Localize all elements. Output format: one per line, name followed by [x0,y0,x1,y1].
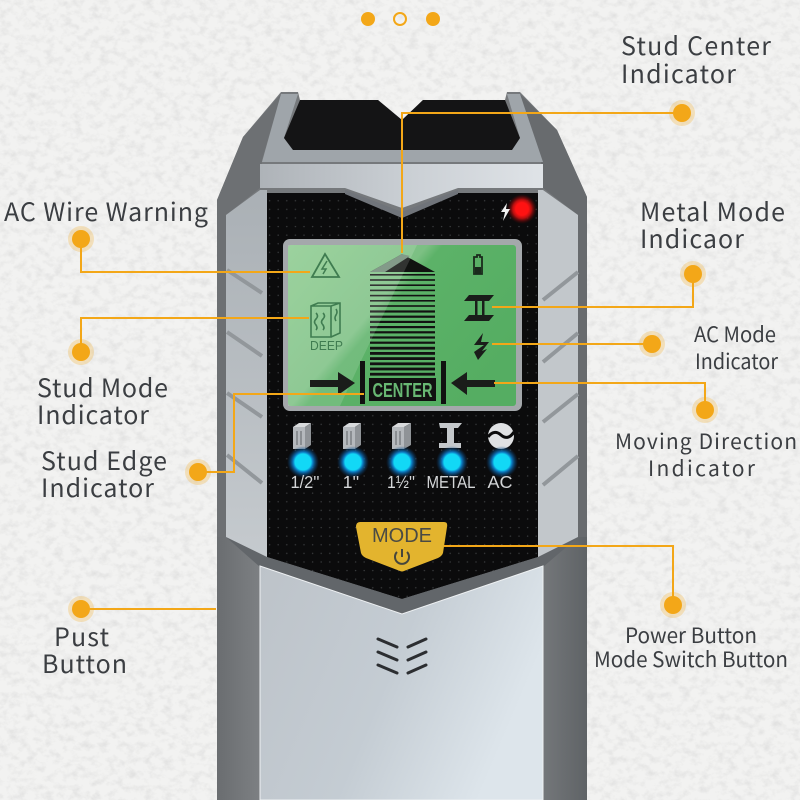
callout: stud edge [41,394,364,505]
right side plate [538,190,578,557]
callout: AC mode [492,319,779,376]
center glare [288,245,417,406]
top silver collar [262,94,543,162]
mode button [356,522,447,572]
CENTER label [369,378,436,402]
speaker slots [378,639,426,673]
icon: metal beam small [439,423,462,448]
callout: AC wire warning: AC Wire Warning [4,193,208,229]
LED labels: METAL [426,472,476,492]
icon: AC bolt [474,333,489,360]
right upper bevel [520,94,587,800]
CENTER label: CENTER [372,380,433,402]
callout: metal mode: Metal Mode [640,193,785,229]
callout: stud mode: Stud Mode [37,369,168,405]
silver band [260,164,543,208]
LED labels [290,472,512,492]
sensor window [284,100,520,150]
left upper bevel [217,94,281,800]
panel dot grid [267,193,538,599]
callout: stud edge: Stud Edge [41,442,167,478]
icon: AC wave [488,423,514,449]
callout: AC mode: Indicator [695,346,779,376]
LED labels: 1/2'' [290,472,320,492]
icon: metal I-beam [464,295,494,321]
LED labels: 1½'' [387,472,415,492]
LCD screen [283,239,522,411]
icon: AC warning triangle [312,254,339,277]
icon: battery [474,255,482,274]
callout: stud mode [37,318,309,432]
icon: power [395,549,409,564]
mode button: MODE [372,525,432,547]
stud and mode indicators row [287,423,518,492]
side ribs [227,270,578,485]
callout: push button [42,596,216,681]
black control panel [267,193,538,599]
left side plate [226,190,267,557]
callout: push button: Pust [54,618,110,654]
callout: stud center: Stud Center [621,27,771,63]
callout: metal mode: Indicaor [640,220,744,256]
callout: stud center [402,27,771,253]
lower chevron band [226,537,578,615]
icon: half inch stud [293,423,311,449]
power warning LED [501,194,537,224]
pagination dots [361,12,440,26]
callout: moving direction: Moving Direction [615,426,797,456]
chevron highlight [345,190,458,218]
blue LEDs [287,446,518,478]
icon: deep stud block [311,303,340,337]
icon: one inch stud [343,423,361,449]
LED labels: AC [488,472,512,492]
outer shell [217,92,587,800]
device body [217,92,587,800]
callout: push button: Button [42,645,127,681]
callout: metal mode [492,193,785,307]
callout: moving direction [494,383,797,483]
callout: power and mode switch button: Mode Switch Button [594,644,788,674]
lower silver panel [260,566,543,800]
edge bars [360,361,446,404]
callout: power and mode switch button: Power Button [625,620,757,650]
center bar stripes [370,254,435,376]
callout: moving direction: Indicator [648,453,756,483]
DEEP label: DEEP [310,339,343,353]
moving direction arrows [310,372,495,395]
LED labels: 1'' [343,472,359,492]
lower right side [543,537,587,800]
callout: AC mode: AC Mode [694,319,776,349]
callout: stud center: Indicator [621,55,736,91]
callout: stud edge: Indicator [41,469,154,505]
lower left side [217,537,260,800]
callout: AC wire warning [4,193,310,272]
icon: inch and half stud [392,423,411,449]
callout: power and mode switch button [444,546,788,674]
callout: stud mode: Indicator [37,396,149,432]
